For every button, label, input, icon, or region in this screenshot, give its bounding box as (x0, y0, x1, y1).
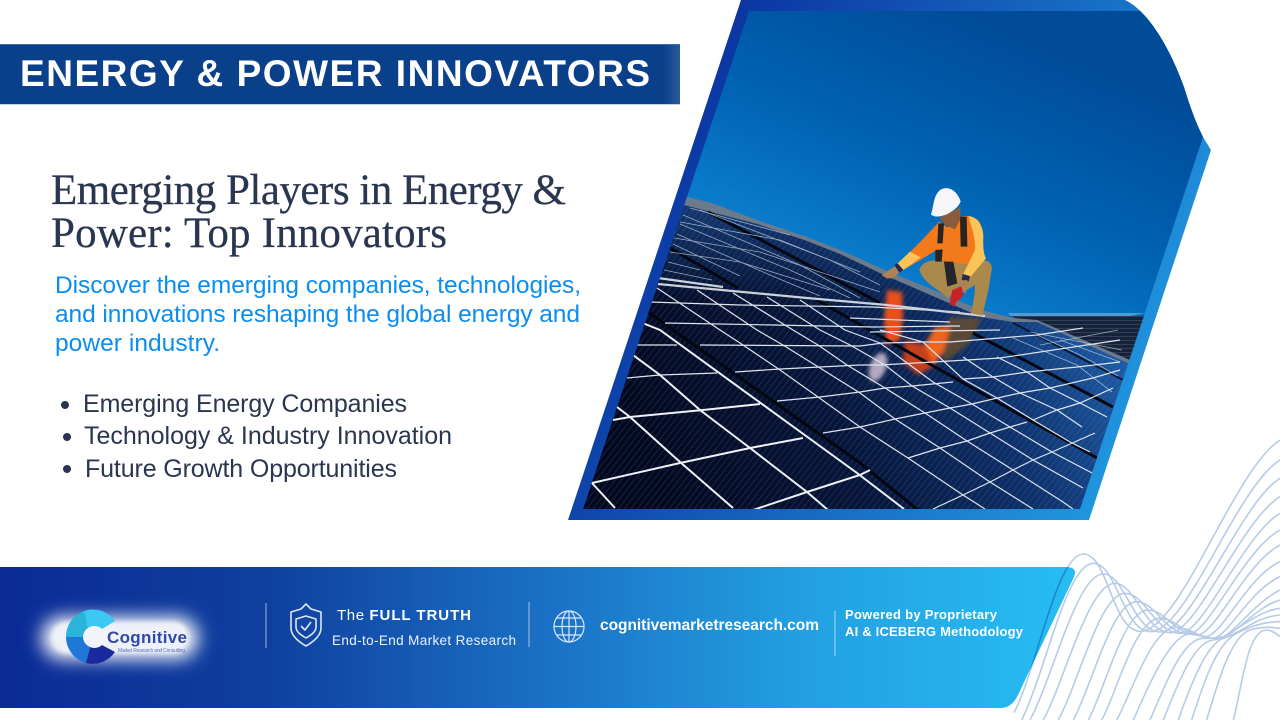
power drill (949, 287, 963, 307)
icon: shield (291, 604, 321, 646)
main title (51, 167, 566, 257)
intro paragraph: and innovations reshaping the global energy and (55, 301, 580, 328)
photo: solar panels and worker (570, 0, 1220, 520)
worker reflection (865, 290, 982, 384)
header banner: ENERGY & POWER INNOVATORS (20, 53, 650, 94)
website address: cognitivemarketresearch.com (600, 617, 819, 634)
hand and cuff (882, 266, 900, 278)
header banner (0, 44, 680, 105)
main title: Emerging Players in Energy & (51, 167, 566, 214)
grey roof edge (680, 195, 1130, 366)
methodology note (845, 607, 1024, 639)
safety harness (935, 217, 967, 262)
module seams (648, 212, 1123, 510)
tagline: the full truth: End-to-End Market Research (332, 633, 516, 648)
methodology note: AI & ICEBERG Methodology (845, 624, 1024, 639)
icon: globe (554, 611, 584, 642)
shirt sleeve highlights (898, 216, 986, 277)
bullet list: Emerging Energy Companies (83, 390, 407, 418)
bullet list: Technology & Industry Innovation (84, 422, 452, 450)
trousers (919, 260, 992, 316)
module grid lines, right side (627, 288, 1120, 509)
bullet list (61, 390, 452, 483)
thin upper grid lines (664, 208, 1122, 392)
logo: Cognitive: Cognitive (107, 628, 187, 647)
photo frame (568, 0, 1211, 520)
intro paragraph (55, 272, 581, 357)
module grid lines, lower left (592, 322, 904, 510)
main title: Power: Top Innovators (51, 210, 447, 257)
wave line crossing the band (1029, 567, 1068, 672)
wave line pattern (1014, 440, 1280, 720)
logo: Cognitive: Market Research and Consulting (118, 648, 185, 654)
intro paragraph: Discover the emerging companies, technologies, (55, 272, 581, 299)
footer band (0, 567, 1075, 708)
hard hat (931, 188, 961, 217)
tagline: the full truth (332, 607, 516, 648)
methodology note: Powered by Proprietary (845, 607, 998, 622)
panel frame rails (658, 278, 985, 316)
tagline: the full truth: The FULL TRUTH (337, 607, 472, 624)
logo: Cognitive (42, 609, 198, 664)
intro paragraph: power industry. (55, 330, 220, 357)
solar panel surface (583, 204, 1130, 509)
bullet list: Future Growth Opportunities (85, 455, 397, 483)
shirt (898, 216, 985, 277)
face (939, 207, 961, 229)
worker (882, 188, 992, 316)
distant dark roof (1008, 313, 1145, 364)
